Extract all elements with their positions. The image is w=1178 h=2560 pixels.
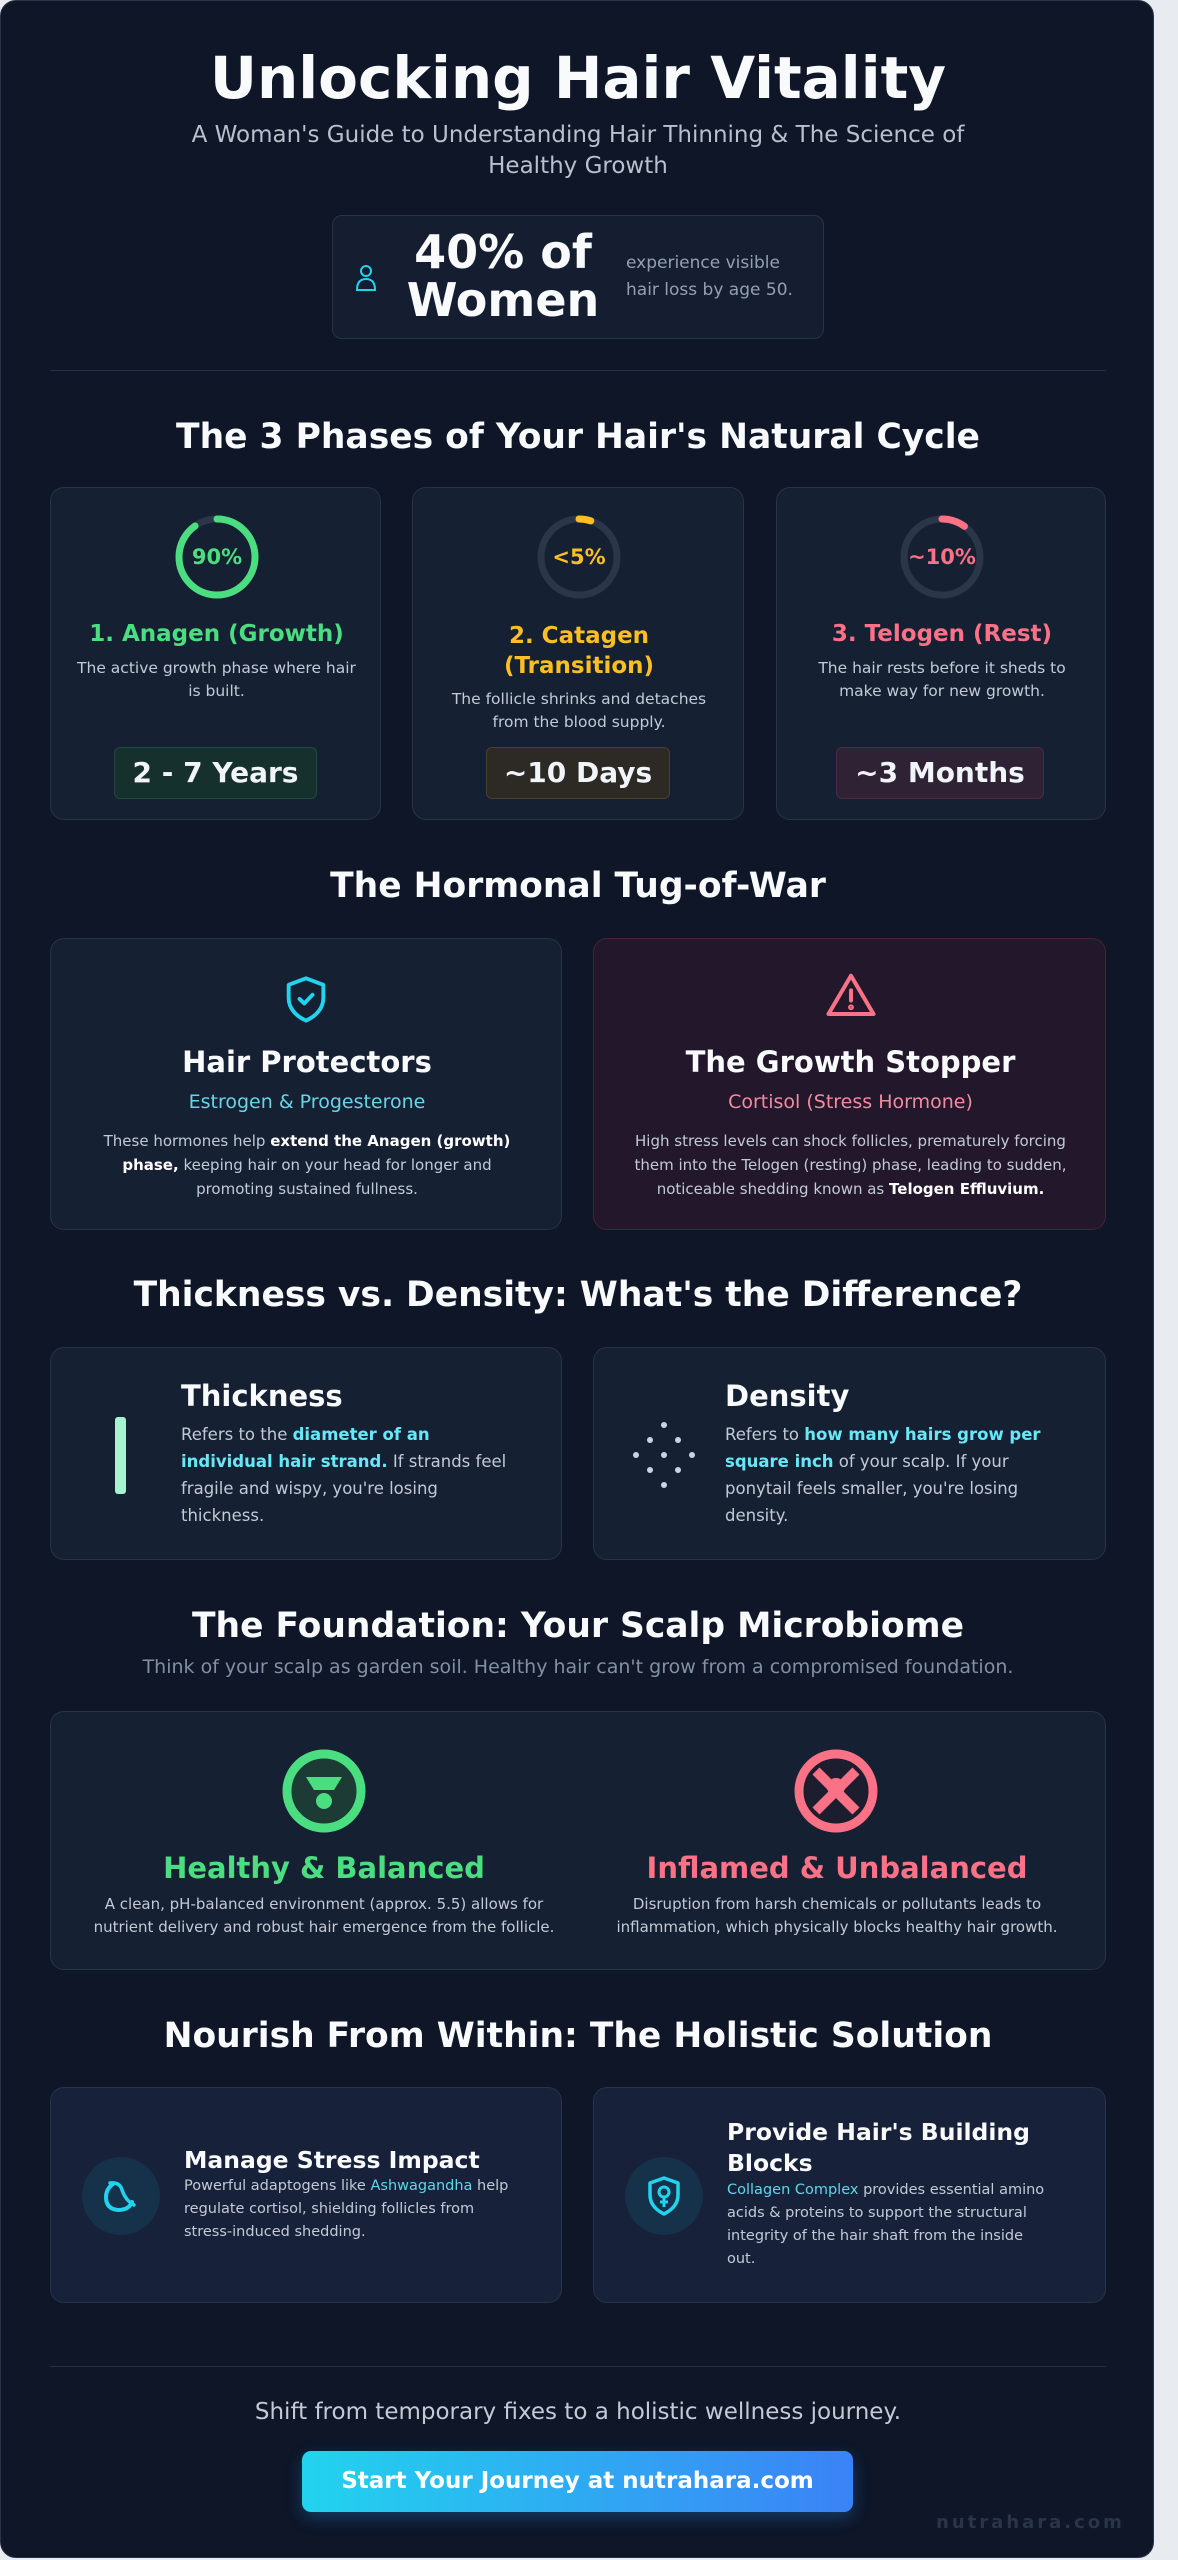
heading: scalp microbiome: The Foundation: Your Scalp Microbiome xyxy=(192,1606,964,1646)
title: Density xyxy=(725,1379,849,1413)
ring 90% xyxy=(176,516,258,598)
panel: hair protectors xyxy=(50,938,562,1230)
badge: 3 months xyxy=(836,747,1044,799)
badge: 3 months: ~3 Months xyxy=(855,756,1025,789)
text: stress-induced shedding. xyxy=(184,2224,366,2240)
text healthy: A clean, pH-balanced environment (approx. 5.5) allows for xyxy=(105,1895,543,1913)
text: acids & proteins to support the structural xyxy=(727,2205,1027,2221)
panel: manage stress xyxy=(50,2087,562,2303)
stat text xyxy=(626,253,793,300)
card title: Hair Protectors xyxy=(182,1045,432,1079)
text: Collagen Complex provides essential amino xyxy=(727,2182,1044,2198)
panel: building blocks xyxy=(593,2087,1106,2303)
ring 5%: <5% xyxy=(552,545,606,569)
badge: 2-7 years xyxy=(114,747,317,799)
subtitle: Healthy Growth xyxy=(488,153,668,179)
phase name xyxy=(504,623,654,679)
stat number: Women xyxy=(407,273,599,327)
badge: 10 days xyxy=(486,747,670,799)
icon: warning xyxy=(826,974,876,1016)
text: regulate cortisol, shielding follicles from xyxy=(184,2201,474,2217)
phase desc: The hair rests before it sheds to make way for new growth. xyxy=(818,659,1066,700)
CTA button xyxy=(302,2451,853,2512)
panel: catagen xyxy=(412,487,744,820)
ring 10%: ~10% xyxy=(908,545,976,569)
stat text: hair loss by age 50. xyxy=(626,280,793,300)
text: Refers to the diameter of an xyxy=(181,1425,430,1444)
subtitle xyxy=(192,122,965,179)
footer text: Shift from temporary fixes to a holistic wellness journey. xyxy=(255,2399,901,2425)
heading: hormonal: The Hormonal Tug-of-War xyxy=(330,866,826,906)
panel: microbiome xyxy=(50,1711,1106,1970)
card title: The Growth Stopper xyxy=(686,1045,1015,1079)
icon: healthy xyxy=(282,1750,366,1832)
CTA button: Start Your Journey at nutrahara.com xyxy=(341,2468,814,2494)
heading: nourish: Nourish From Within: The Holistic Solution xyxy=(164,2016,992,2056)
ring 10% xyxy=(900,516,984,598)
subheading: Think of your scalp as garden soil. Healthy hair can't grow from a compromised foundation. xyxy=(143,1656,1013,1678)
panel: telogen xyxy=(776,487,1106,820)
title: Thickness xyxy=(181,1379,343,1413)
phase name: 1. Anagen (Growth) xyxy=(89,621,344,647)
text: Refers to how many hairs grow per square inch of your scalp. If your ponytail feels smaller, you're losing density. xyxy=(725,1425,1041,1525)
icon: shield check xyxy=(286,976,326,1022)
description: High stress levels can shock follicles, prematurely forcing them into the Telogen (resting) phase, leading to sudden, noticeable shedding known as Telogen Effluvium. xyxy=(634,1132,1067,1198)
title inflamed: Inflamed & Unbalanced xyxy=(647,1851,1027,1885)
text: integrity of the hair shaft from the inside xyxy=(727,2228,1023,2244)
stat number: 40% of xyxy=(414,225,592,279)
icon: person xyxy=(356,265,376,291)
text xyxy=(727,2182,1044,2267)
text: out. xyxy=(727,2251,755,2267)
phase name: 3. Telogen (Rest) xyxy=(832,621,1052,647)
text healthy: nutrient delivery and robust hair emergence from the follicle. xyxy=(94,1918,554,1936)
text inflamed: Disruption from harsh chemicals or pollutants leads to inflammation, which physically blocks healthy hair growth. xyxy=(616,1895,1058,1936)
icon: inflamed xyxy=(794,1750,878,1832)
subtitle: A Woman's Guide to Understanding Hair Thinning & The Science of xyxy=(192,122,964,148)
ring 5% xyxy=(538,516,620,598)
panel: thickness xyxy=(50,1347,562,1560)
icon: shield female xyxy=(625,2157,703,2235)
ring 90%: 90% xyxy=(192,545,242,569)
panel: anagen xyxy=(50,487,381,820)
stat number xyxy=(407,225,599,327)
subtitle: Estrogen & Progesterone xyxy=(189,1091,425,1113)
text: individual hair strand. If strands feel fragile and wispy, you're losing thickness. xyxy=(181,1452,506,1525)
badge: 10 days: ~10 Days xyxy=(504,756,652,789)
phase name: 2. Catagen xyxy=(509,623,649,649)
stat box xyxy=(332,215,824,339)
watermark: nutrahara.com xyxy=(936,2512,1125,2533)
text: Powerful adaptogens like Ashwagandha help xyxy=(184,2178,508,2194)
subtitle: Cortisol (Stress Hormone) xyxy=(728,1091,973,1113)
panel: growth stopper xyxy=(593,938,1106,1230)
badge: 2-7 years: 2 - 7 Years xyxy=(133,756,298,789)
title: Provide Hair's Building Blocks xyxy=(727,2118,1030,2177)
panel: density xyxy=(593,1347,1106,1560)
text healthy xyxy=(94,1895,554,1936)
title: Manage Stress Impact xyxy=(184,2146,480,2174)
icon: stress circle xyxy=(82,2157,160,2235)
icon: dots xyxy=(633,1422,695,1488)
heading: thickness vs density: Thickness vs. Density: What's the Difference? xyxy=(134,1275,1022,1315)
phase desc: The follicle shrinks and detaches from the blood supply. xyxy=(452,690,706,731)
title: Unlocking Hair Vitality xyxy=(210,44,946,112)
phase name: (Transition) xyxy=(504,653,654,679)
title healthy: Healthy & Balanced xyxy=(163,1851,485,1885)
text xyxy=(184,2178,508,2240)
icon: strand bar xyxy=(115,1417,126,1494)
phase desc: The active growth phase where hair is built. xyxy=(77,659,356,700)
heading: phases: The 3 Phases of Your Hair's Natural Cycle xyxy=(176,417,980,457)
stat text: experience visible xyxy=(626,253,780,273)
description: These hormones help extend the Anagen (growth) phase, keeping hair on your head for longer and promoting sustained fullness. xyxy=(104,1132,510,1198)
